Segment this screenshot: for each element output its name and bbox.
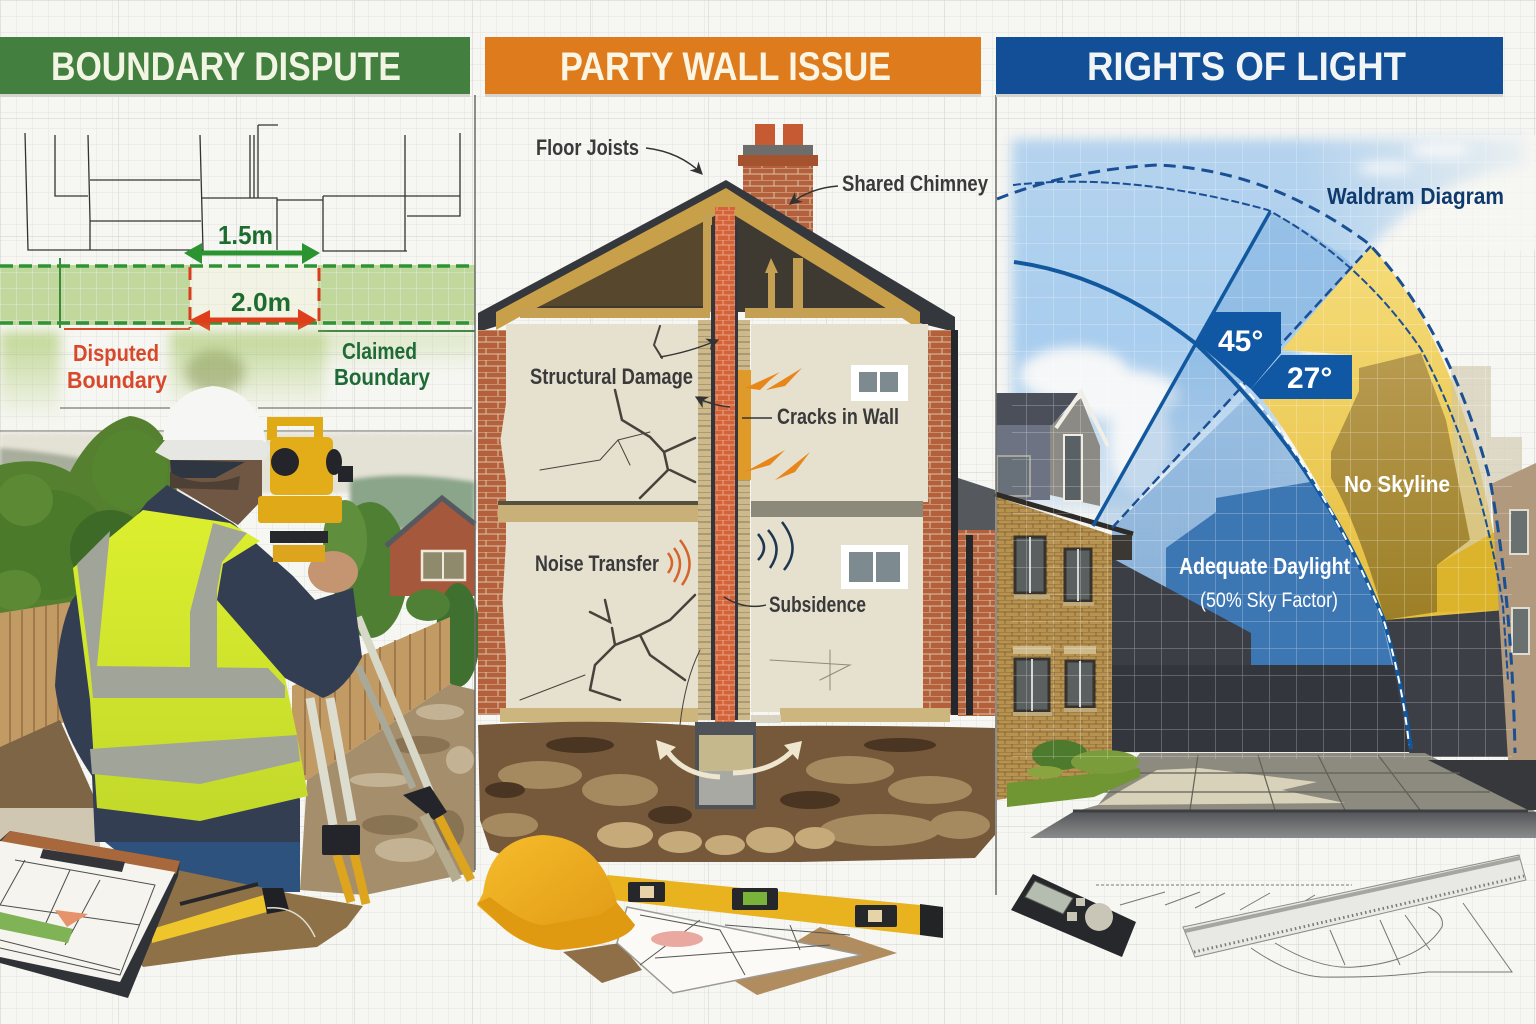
measurement: 2.0m: 2.0m	[231, 287, 291, 317]
heading: rights of light	[996, 37, 1503, 97]
heading: rights of light: RIGHTS OF LIGHT	[1087, 45, 1406, 89]
label: disputed boundary	[67, 340, 167, 393]
dirt ground	[0, 684, 475, 895]
brick side walls	[478, 330, 953, 715]
yellow no-skyline region	[1262, 246, 1505, 622]
soil and foundations	[478, 722, 995, 862]
timber fence	[0, 602, 450, 780]
clouds	[1020, 142, 1472, 495]
label: disputed boundary: Boundary	[67, 367, 167, 393]
heading: boundary dispute	[0, 37, 470, 97]
blue daylight wedge	[1093, 212, 1355, 528]
measuring tape	[152, 884, 315, 943]
grass and shrubs	[1007, 740, 1140, 807]
party wall labels: Noise Transfer	[535, 551, 659, 576]
construction plan	[617, 907, 862, 993]
sky fade at top right	[1300, 135, 1535, 250]
green boundary strip	[0, 258, 475, 331]
party wall labels: Structural Damage	[530, 364, 693, 389]
road	[1030, 812, 1536, 838]
white hard hat	[163, 386, 266, 442]
yellow building silhouette	[1331, 353, 1470, 620]
tripod	[310, 617, 471, 904]
roof	[478, 180, 955, 332]
right-hand brick building	[1491, 463, 1536, 760]
site plan sketch	[25, 125, 460, 251]
shared chimney	[738, 124, 818, 236]
party wall labels	[530, 135, 989, 617]
wooden table	[130, 870, 363, 967]
waldram arcs and rays	[997, 165, 1515, 753]
windows	[841, 365, 908, 589]
laser distance meter	[1011, 874, 1136, 957]
panel: rights of light	[995, 135, 1536, 977]
measurement: 1.5m	[184, 220, 320, 264]
panel dividers	[475, 95, 996, 895]
brick house with windows	[995, 494, 1133, 800]
background trees	[0, 416, 408, 640]
heading: party wall issue: PARTY WALL ISSUE	[560, 45, 891, 89]
label: claimed boundary: Claimed	[342, 338, 417, 364]
spirit level	[607, 875, 943, 938]
background pale tower	[1451, 366, 1522, 560]
theodolite	[258, 417, 353, 562]
party wall labels: Floor Joists	[536, 135, 639, 160]
yellow hard hat	[477, 835, 635, 950]
ceiling beam and props	[520, 212, 910, 318]
label: adequate daylight: (50% Sky Factor)	[1200, 589, 1338, 612]
dark wall and garage	[1110, 557, 1509, 757]
surveyor	[55, 386, 362, 892]
party wall labels: Subsidence	[769, 592, 866, 617]
27 degree badge	[1251, 355, 1352, 399]
shrubs right	[406, 583, 480, 687]
party wall column	[698, 207, 751, 727]
27 degree badge: 27°	[1287, 362, 1332, 395]
hi-vis vest	[73, 510, 308, 821]
paper rules behind scene	[0, 408, 472, 431]
label: adequate daylight	[1179, 553, 1350, 612]
heading: boundary dispute: BOUNDARY DISPUTE	[51, 45, 401, 89]
lower blue sky-factor region	[1110, 393, 1395, 665]
label: waldram diagram: Waldram Diagram	[1327, 183, 1504, 209]
floor band	[498, 501, 923, 522]
hand	[308, 551, 358, 593]
45 degree badge	[1197, 312, 1281, 389]
sky	[1012, 139, 1525, 510]
measurement: 1.5m: 1.5m	[218, 220, 273, 250]
drawing sketches	[1096, 885, 1512, 977]
background brick house	[386, 498, 475, 596]
base course	[500, 708, 950, 723]
45 degree badge: 45°	[1218, 325, 1263, 358]
green wash	[0, 332, 475, 422]
label: no skyline: No Skyline	[1344, 471, 1450, 497]
blue building silhouette	[1166, 482, 1392, 665]
panel: party wall issue	[477, 124, 995, 995]
sound waves	[668, 522, 793, 585]
paving	[1073, 753, 1536, 812]
label: claimed boundary: Boundary	[334, 364, 430, 390]
neck and head	[170, 457, 262, 525]
label: claimed boundary	[334, 338, 430, 390]
orange crack bursts	[745, 368, 810, 480]
heading: party wall issue	[485, 37, 981, 97]
wall cracks	[520, 326, 850, 725]
ground movement arrows	[656, 740, 802, 777]
upper left house	[996, 392, 1108, 506]
neighbouring extension	[951, 330, 995, 716]
plaster walls	[506, 324, 928, 712]
party wall labels: Cracks in Wall	[777, 404, 899, 429]
wooden boards	[563, 927, 897, 995]
measurement: 2.0m	[190, 287, 317, 331]
clipboard with plan	[0, 831, 180, 998]
diagram grid overlay	[1012, 139, 1512, 759]
vest reflective straps	[77, 523, 300, 784]
steel ruler	[1183, 855, 1526, 957]
party wall labels: Shared Chimney	[842, 171, 989, 196]
leader lines	[646, 148, 838, 606]
label: disputed boundary: Disputed	[73, 340, 159, 366]
hazy sky and hills	[0, 433, 475, 530]
panel: boundary dispute	[0, 125, 480, 998]
attic	[500, 190, 925, 312]
jacket body	[55, 485, 362, 842]
jeans	[100, 838, 300, 892]
label: adequate daylight: Adequate Daylight	[1179, 553, 1350, 579]
